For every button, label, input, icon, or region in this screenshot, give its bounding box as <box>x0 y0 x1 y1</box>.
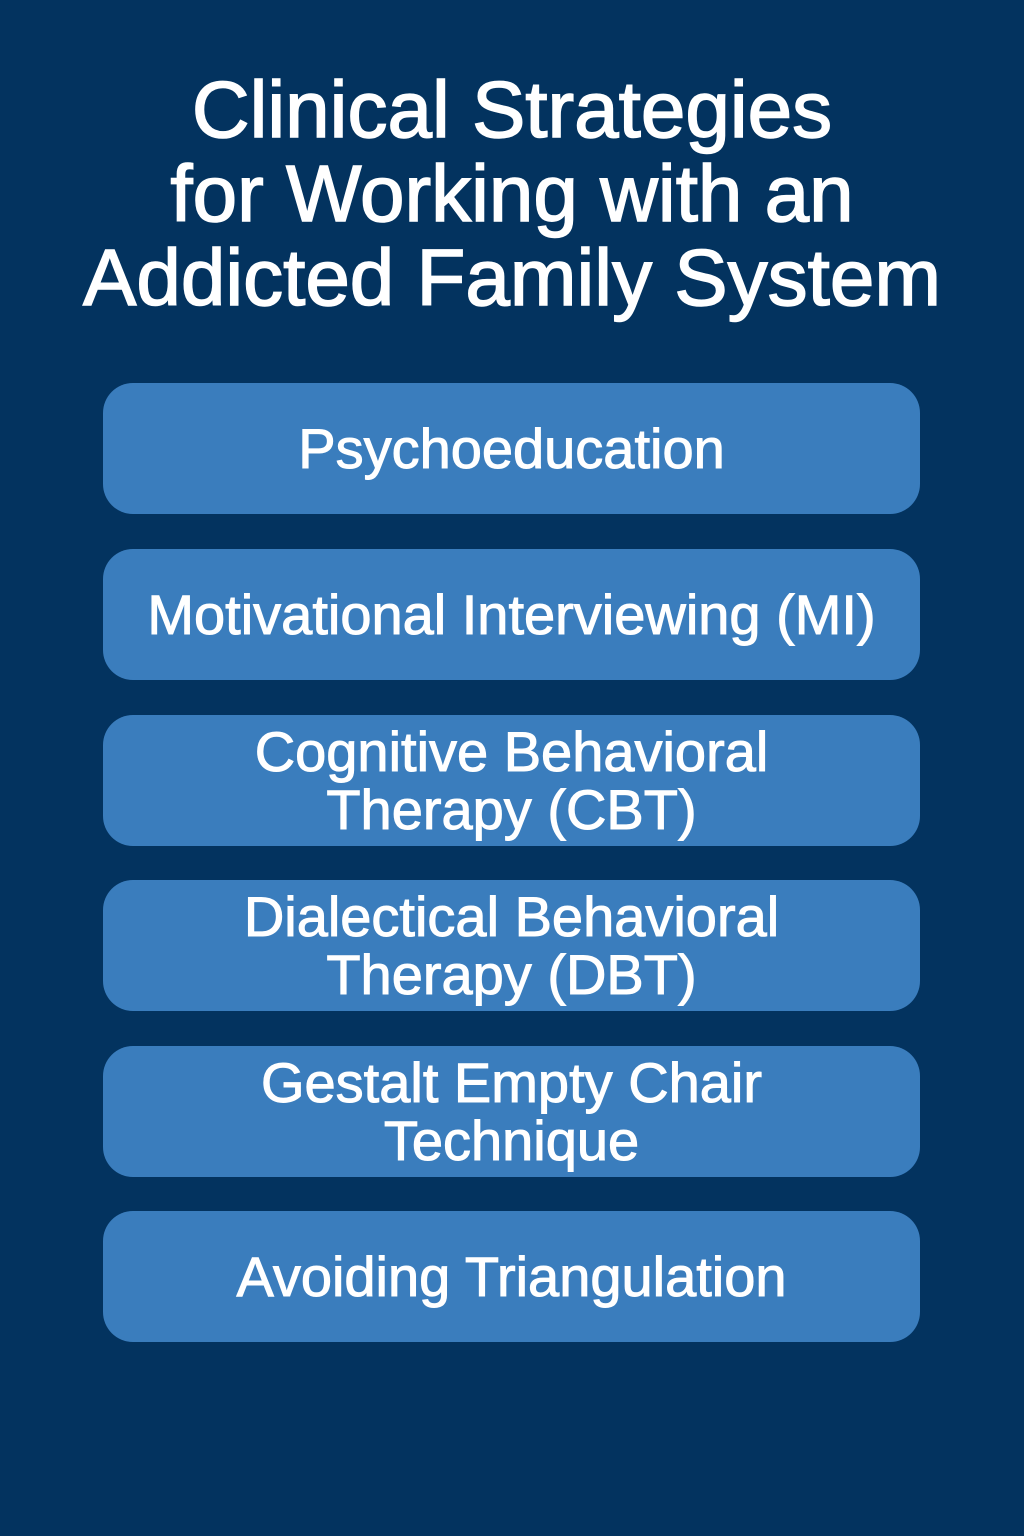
box: gestalt <box>103 1046 920 1177</box>
title: Clinical Strategies <box>192 65 832 154</box>
box: avoiding triangulation: Avoiding Triangulation <box>236 1244 787 1308</box>
box: psychoeducation: Psychoeducation <box>298 416 725 480</box>
box: motivational interviewing <box>103 549 920 680</box>
box: gestalt: Technique <box>384 1108 639 1172</box>
box: motivational interviewing: Motivational Interviewing (MI) <box>147 582 876 646</box>
box: avoiding triangulation <box>103 1211 920 1342</box>
box: DBT: Dialectical Behavioral <box>244 884 779 948</box>
title <box>82 65 941 322</box>
box: psychoeducation <box>103 383 920 514</box>
box: CBT: Therapy (CBT) <box>326 778 697 840</box>
box: gestalt: Gestalt Empty Chair <box>261 1050 762 1114</box>
box: DBT: Therapy (DBT) <box>326 942 697 1006</box>
box: DBT <box>103 880 920 1011</box>
box: CBT <box>103 715 920 846</box>
box: CBT: Cognitive Behavioral <box>255 720 768 782</box>
title: for Working with an <box>170 149 854 238</box>
title: Addicted Family System <box>83 233 941 322</box>
